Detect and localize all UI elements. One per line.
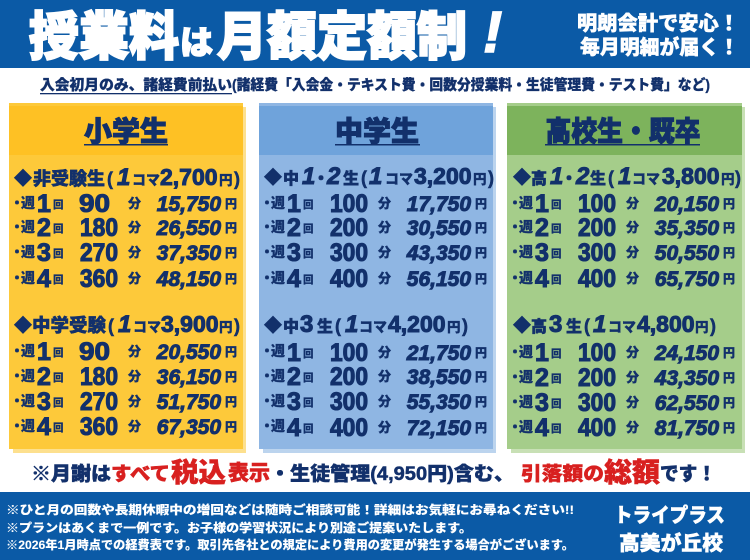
plan: non-exam: 15,750 bbox=[157, 193, 221, 216]
plan: grades 1-2: 1 bbox=[618, 163, 631, 190]
heading: junior high: 中学生 bbox=[335, 116, 419, 147]
plan: grades 1-2: 56,150 bbox=[407, 268, 471, 291]
plan: non-exam: 円 bbox=[225, 197, 237, 211]
plan: grades 1-2: 50,550 bbox=[655, 242, 719, 265]
plan: grade 3: ◆ bbox=[264, 316, 282, 336]
plan: grades 1-2: 3,800 bbox=[662, 163, 720, 189]
plan: exam: 分 bbox=[128, 394, 141, 409]
plan: grade 3: ) bbox=[710, 316, 716, 336]
plan: non-exam: 週 bbox=[21, 195, 35, 211]
plan: grades 1-2: ) bbox=[735, 168, 741, 188]
plan: non-exam: 非受験生 bbox=[33, 168, 105, 189]
plan: non-exam: 円 bbox=[225, 221, 237, 235]
tagline: 明朗会計で安心！ bbox=[577, 12, 739, 35]
plan: exam: 67,350 bbox=[157, 416, 221, 439]
plan: exam: 週 bbox=[21, 368, 35, 384]
header band bbox=[0, 0, 750, 68]
plan: non-exam: 2,700 bbox=[160, 164, 218, 190]
plan: grade 3: 分 bbox=[626, 370, 639, 385]
plan: exam: 1 bbox=[118, 311, 131, 338]
footnotes: ※プランはあくまで一例です。お子様の学習状況により別途ご提案いたします。 bbox=[6, 520, 472, 535]
plan: grades 1-2: 回 bbox=[303, 248, 314, 260]
plan: grade 3 bbox=[508, 311, 735, 442]
plan: grade 3: 1 bbox=[535, 339, 549, 367]
plan: grades 1-2: 週 bbox=[271, 244, 285, 260]
plan: grade 3: 4 bbox=[287, 414, 301, 442]
plan: grade 3: ・ bbox=[260, 393, 274, 409]
plan: exam: 週 bbox=[21, 418, 35, 434]
panel: junior high bbox=[259, 103, 496, 453]
plan: non-exam: ・ bbox=[10, 244, 24, 260]
plan: grades 1-2: コマ bbox=[632, 171, 660, 187]
plan: grades 1-2: 週 bbox=[519, 270, 533, 286]
plan: non-exam: 1 bbox=[117, 164, 130, 191]
plan: non-exam: 回 bbox=[53, 223, 64, 235]
plan: exam: ◆ bbox=[14, 316, 32, 336]
plan: grades 1-2: ・ bbox=[508, 219, 522, 235]
plan: grade 3: ) bbox=[462, 316, 468, 336]
plan: grades 1-2: 100 bbox=[330, 190, 368, 218]
plan: grades 1-2: 分 bbox=[378, 196, 391, 211]
plan: grades 1-2: 4 bbox=[535, 265, 549, 293]
plan: grades 1-2: 3 bbox=[535, 239, 549, 267]
plan: grades 1-2: 生 bbox=[343, 169, 359, 188]
plan: grade 3: 中 bbox=[283, 317, 299, 336]
plan: grade 3: 回 bbox=[551, 348, 562, 360]
plan: exam: 1 bbox=[37, 338, 51, 366]
plan: grade 3: ・ bbox=[260, 343, 274, 359]
plan: grades 1-2: 300 bbox=[330, 239, 368, 267]
plan: grades 1-2: 分 bbox=[378, 271, 391, 286]
plan: non-exam: 37,350 bbox=[157, 242, 221, 265]
plan: grade 3: 400 bbox=[578, 414, 616, 442]
plan: grade 3: 週 bbox=[271, 418, 285, 434]
plan: exam: 270 bbox=[80, 388, 118, 416]
plan: grade 3: 分 bbox=[378, 369, 391, 384]
plan: grades 1-2: 回 bbox=[551, 248, 562, 260]
plan: grade 3: ( bbox=[584, 316, 590, 336]
plan: grade 3: 100 bbox=[330, 339, 368, 367]
plan: grade 3: 200 bbox=[330, 363, 368, 391]
school name bbox=[614, 504, 725, 555]
plan: exam: ・ bbox=[10, 418, 24, 434]
plan: non-exam: 円 bbox=[225, 246, 237, 260]
plan: grade 3: ・ bbox=[508, 394, 522, 410]
plan: non-exam: 週 bbox=[21, 219, 35, 235]
plan: grades 1-2: 400 bbox=[578, 265, 616, 293]
plan: grades 1-2: 週 bbox=[271, 270, 285, 286]
plan: grades 1-2: 2 bbox=[287, 214, 301, 242]
plan: exam: ・ bbox=[10, 393, 24, 409]
plan: grade 3: 円 bbox=[723, 346, 735, 360]
plan: grades 1-2: 高 bbox=[531, 169, 547, 188]
plan: non-exam: 円 bbox=[225, 272, 237, 286]
plan: grades 1-2: ◆ bbox=[513, 168, 531, 188]
plan: grade 3: 分 bbox=[378, 394, 391, 409]
plan: grade 3: ・ bbox=[508, 344, 522, 360]
plan: grades 1-2: 週 bbox=[271, 195, 285, 211]
plan: grade 3: コマ bbox=[359, 319, 387, 335]
plan: grade 3: 円 bbox=[475, 370, 487, 384]
plan: grades 1-2: 中 bbox=[283, 169, 299, 188]
plan: grades 1-2: 生 bbox=[590, 169, 606, 188]
plan: grade 3: 2 bbox=[287, 363, 301, 391]
plan: grade 3: ・ bbox=[260, 368, 274, 384]
plan: grade 3: 4,200 bbox=[388, 311, 446, 337]
plan: grades 1-2: 回 bbox=[551, 223, 562, 235]
plan: grades 1-2: 300 bbox=[578, 239, 616, 267]
tax note bbox=[31, 458, 716, 488]
plan: non-exam: 円 bbox=[219, 173, 232, 188]
tax note: 引落額の bbox=[521, 463, 604, 485]
plan: grade 3: 回 bbox=[303, 372, 314, 384]
plan: grade 3: 円 bbox=[475, 421, 487, 435]
footnotes: ※2026年1月時点での経費表です。取引先各社との規定により費用の変更が発生する場合がございます。 bbox=[6, 537, 574, 552]
plan: grades 1-2: 週 bbox=[519, 244, 533, 260]
plan: grade 3: 1 bbox=[345, 311, 358, 338]
tax note: です！ bbox=[660, 463, 716, 485]
plan: grade 3: 円 bbox=[723, 371, 735, 385]
plan: grades 1-2: ・ bbox=[561, 171, 577, 188]
plan: non-exam: 回 bbox=[53, 248, 64, 260]
plan: grades 1-2: ・ bbox=[260, 219, 274, 235]
title: は bbox=[180, 24, 213, 61]
plan: grades 1-2: ・ bbox=[508, 244, 522, 260]
plan: non-exam: コマ bbox=[132, 172, 160, 188]
plan: grades 1-2: 200 bbox=[330, 214, 368, 242]
plan: exam: コマ bbox=[133, 319, 161, 335]
plan: grade 3: コマ bbox=[608, 319, 636, 335]
plan: grades 1-2: 17,750 bbox=[407, 193, 471, 216]
plan: grade 3: 分 bbox=[378, 420, 391, 435]
plan: grades 1-2: 20,150 bbox=[654, 193, 719, 216]
plan: exam: 90 bbox=[79, 338, 110, 366]
plan: grades 1-2: 2 bbox=[535, 214, 549, 242]
plan: grade 3: 円 bbox=[475, 395, 487, 409]
plan: non-exam: 分 bbox=[128, 220, 141, 235]
plan: grades 1-2: 分 bbox=[378, 220, 391, 235]
footnotes bbox=[6, 502, 574, 552]
plan: grades 1-2: ・ bbox=[508, 195, 522, 211]
plan: non-exam: 分 bbox=[128, 196, 141, 211]
plan: grades 1-2: 円 bbox=[723, 272, 735, 286]
plan: non-exam: 1 bbox=[37, 190, 51, 218]
plan: non-exam bbox=[10, 164, 240, 293]
plan: grade 3: 分 bbox=[626, 420, 639, 435]
plan: grade 3: 回 bbox=[303, 423, 314, 435]
plan: exam: 回 bbox=[53, 397, 64, 409]
plan: exam: 円 bbox=[225, 420, 237, 434]
plan: grades 1-2: 200 bbox=[578, 214, 616, 242]
plan: exam: 4 bbox=[37, 413, 51, 441]
plan: exam: 円 bbox=[225, 370, 237, 384]
plan: grades 1-2: 回 bbox=[303, 199, 314, 211]
panel: elementary bbox=[9, 103, 246, 453]
plan: grades 1-2: 4 bbox=[287, 265, 301, 293]
plan: grade 3: 円 bbox=[475, 346, 487, 360]
plan: grades 1-2 bbox=[260, 163, 494, 293]
tax note: ・生徒管理(4,950円)含む、 bbox=[270, 462, 514, 485]
plan: grades 1-2: 円 bbox=[473, 172, 486, 187]
plan: grade 3: 1 bbox=[287, 339, 301, 367]
plan: grade 3: 38,550 bbox=[407, 366, 471, 389]
plan: grade 3: ( bbox=[335, 316, 341, 336]
plan: non-exam: 48,150 bbox=[156, 268, 221, 291]
plan: grades 1-2: 円 bbox=[723, 246, 735, 260]
plan: grade 3: 21,750 bbox=[406, 342, 471, 365]
plan: exam: 円 bbox=[219, 320, 232, 335]
plan: grades 1-2: 円 bbox=[475, 221, 487, 235]
plan: grades 1-2: ・ bbox=[508, 270, 522, 286]
plan: exam: 円 bbox=[225, 395, 237, 409]
plan: exam: 2 bbox=[37, 363, 51, 391]
plan: grade 3: 4,800 bbox=[637, 311, 695, 337]
heading: elementary: 小学生 bbox=[84, 116, 168, 147]
plan: grade 3: 分 bbox=[626, 345, 639, 360]
plan: non-exam: ( bbox=[107, 169, 113, 189]
plan: grade 3: 週 bbox=[271, 368, 285, 384]
prepayment note: (諸経費「入会金・テキスト費・回数分授業料・生徒管理費・テスト費」など) bbox=[232, 76, 710, 94]
tax note: 表示 bbox=[228, 462, 270, 485]
plan: grades 1-2: 回 bbox=[551, 199, 562, 211]
title bbox=[29, 0, 502, 67]
plan: grade 3: 週 bbox=[271, 393, 285, 409]
plan: grade 3: 円 bbox=[723, 396, 735, 410]
plan: grades 1-2: 回 bbox=[551, 274, 562, 286]
plan: grade 3 bbox=[260, 311, 487, 442]
prepayment note: 入会初月のみ、諸経費前払い bbox=[40, 76, 232, 94]
tax note: 税込 bbox=[171, 458, 226, 488]
plan: non-exam: 3 bbox=[37, 239, 51, 267]
plan: non-exam: ・ bbox=[10, 219, 24, 235]
tax note: ※月謝は bbox=[31, 463, 111, 485]
plan: non-exam: ・ bbox=[10, 270, 24, 286]
plan: non-exam: 回 bbox=[53, 274, 64, 286]
plan: grades 1-2: 円 bbox=[723, 221, 735, 235]
plan: exam: 回 bbox=[53, 347, 64, 359]
plan: non-exam: ◆ bbox=[14, 169, 32, 189]
plan: grade 3: 1 bbox=[593, 311, 606, 338]
plan: grade 3: 回 bbox=[551, 373, 562, 385]
plan: grades 1-2: ・ bbox=[313, 171, 329, 188]
plan: grade 3: 43,350 bbox=[654, 367, 719, 390]
plan: grades 1-2: 35,350 bbox=[655, 217, 719, 240]
plan: grades 1-2: 65,750 bbox=[655, 268, 719, 291]
plan: grades 1-2: 分 bbox=[626, 196, 639, 211]
plan: grades 1-2: 分 bbox=[626, 245, 639, 260]
plan: exam: 分 bbox=[128, 344, 141, 359]
plan: exam: ( bbox=[108, 316, 114, 336]
title: 月額定額制 bbox=[217, 9, 467, 67]
plan: grades 1-2: 分 bbox=[626, 220, 639, 235]
plan: grade 3: 3 bbox=[549, 311, 562, 338]
plan: grades 1-2: ・ bbox=[260, 244, 274, 260]
plan: grades 1-2: 円 bbox=[721, 172, 734, 187]
plan: non-exam: 分 bbox=[128, 271, 141, 286]
plan: grade 3: 300 bbox=[330, 388, 368, 416]
tagline: 毎月明細が届く！ bbox=[580, 35, 739, 59]
plan: grade 3: 週 bbox=[271, 343, 285, 359]
plan: exam: ・ bbox=[10, 368, 24, 384]
plan: grades 1-2: 週 bbox=[271, 219, 285, 235]
footnotes: ※ひと月の回数や長期休暇中の増回などは随時ご相談可能！詳細はお気軽にお尋ねください!! bbox=[6, 502, 574, 517]
plan: grade 3: 回 bbox=[551, 398, 562, 410]
plan: grade 3: 分 bbox=[626, 395, 639, 410]
plan: grades 1-2: 1 bbox=[369, 163, 382, 190]
plan: grade 3: 24,150 bbox=[654, 342, 719, 365]
plan: exam: ・ bbox=[10, 343, 24, 359]
plan: grade 3: 生 bbox=[566, 317, 582, 336]
plan: grade 3: 400 bbox=[330, 414, 368, 442]
title: 授業料 bbox=[29, 9, 179, 67]
plan: exam: 3,900 bbox=[161, 311, 219, 337]
plan: exam: 51,750 bbox=[157, 391, 221, 414]
plan: grade 3: 62,550 bbox=[655, 392, 719, 415]
plan: exam: 分 bbox=[128, 419, 141, 434]
plan: grade 3: 200 bbox=[578, 364, 616, 392]
plan: grade 3: 4 bbox=[535, 414, 549, 442]
plan: grade 3: ・ bbox=[508, 369, 522, 385]
plan: exam: 円 bbox=[225, 345, 237, 359]
plan: grades 1-2: 2 bbox=[326, 163, 341, 190]
plan: grades 1-2: 1 bbox=[287, 190, 301, 218]
plan: grade 3: ・ bbox=[260, 418, 274, 434]
plan: grade 3: 回 bbox=[303, 397, 314, 409]
plan: grades 1-2: 100 bbox=[578, 190, 616, 218]
plan: grades 1-2: 円 bbox=[475, 272, 487, 286]
plan: non-exam: 回 bbox=[53, 199, 64, 211]
plan: grades 1-2: 30,550 bbox=[407, 217, 471, 240]
plan: exam bbox=[10, 311, 240, 441]
plan: non-exam: 分 bbox=[128, 245, 141, 260]
plan: grades 1-2: 円 bbox=[475, 197, 487, 211]
plan: non-exam: 90 bbox=[79, 190, 110, 218]
plan: non-exam: 週 bbox=[21, 244, 35, 260]
plan: exam: 分 bbox=[128, 369, 141, 384]
plan: grade 3: ・ bbox=[508, 419, 522, 435]
plan: grade 3: 高 bbox=[531, 317, 547, 336]
plan: exam: 36,150 bbox=[157, 366, 221, 389]
plan: grades 1-2: コマ bbox=[385, 171, 413, 187]
plan: non-exam: 週 bbox=[21, 270, 35, 286]
plan: grades 1-2: 回 bbox=[303, 274, 314, 286]
plan: grades 1-2: 2 bbox=[575, 163, 590, 190]
prepayment note bbox=[40, 76, 710, 94]
plan: non-exam: 4 bbox=[37, 265, 51, 293]
plan: grades 1-2: 400 bbox=[330, 265, 368, 293]
plan: grades 1-2: 円 bbox=[475, 246, 487, 260]
plan: exam: 3 bbox=[37, 388, 51, 416]
plan: grade 3: 81,750 bbox=[655, 417, 719, 440]
plan: non-exam: 2 bbox=[37, 214, 51, 242]
plan: grade 3: 3 bbox=[287, 388, 301, 416]
tax note: すべて bbox=[111, 463, 170, 485]
plan: grades 1-2: 3 bbox=[287, 239, 301, 267]
plan: grade 3: 生 bbox=[317, 317, 333, 336]
plan: exam: 20,550 bbox=[156, 341, 221, 364]
plan: grades 1-2: ・ bbox=[260, 270, 274, 286]
plan: grade 3: 円 bbox=[447, 320, 460, 335]
plan: non-exam: 26,550 bbox=[156, 217, 221, 240]
plan: exam: 回 bbox=[53, 422, 64, 434]
plan: grade 3: 円 bbox=[695, 320, 708, 335]
tagline bbox=[577, 12, 739, 59]
plan: grade 3: 回 bbox=[303, 348, 314, 360]
plan: grade 3: ◆ bbox=[513, 316, 531, 336]
plan: grades 1-2: 円 bbox=[723, 197, 735, 211]
plan: exam: 週 bbox=[21, 343, 35, 359]
plan: grade 3: 2 bbox=[535, 364, 549, 392]
plan: grades 1-2 bbox=[508, 163, 741, 293]
plan: exam: 回 bbox=[53, 372, 64, 384]
plan: grades 1-2: 1 bbox=[302, 163, 315, 190]
panel: high school bbox=[507, 103, 745, 453]
plan: grades 1-2: 回 bbox=[303, 223, 314, 235]
plan: exam: 中学受験 bbox=[32, 315, 107, 336]
plan: grades 1-2: ・ bbox=[260, 195, 274, 211]
plan: grades 1-2: 分 bbox=[626, 271, 639, 286]
plan: grades 1-2: ( bbox=[608, 168, 614, 188]
plan: grade 3: 100 bbox=[578, 339, 616, 367]
heading: high school: 高校生・既卒 bbox=[546, 116, 700, 147]
tax note: 総額 bbox=[604, 458, 660, 488]
plan: non-exam: 180 bbox=[80, 214, 118, 242]
plan: grades 1-2: 1 bbox=[535, 190, 549, 218]
plan: non-exam: ・ bbox=[10, 195, 24, 211]
school name: 高美が丘校 bbox=[619, 531, 723, 555]
plan: grades 1-2: 週 bbox=[519, 195, 533, 211]
plan: grade 3: 週 bbox=[519, 394, 533, 410]
school name: トライプラス bbox=[614, 504, 725, 527]
plan: grade 3: 週 bbox=[519, 419, 533, 435]
plan: grades 1-2: ( bbox=[361, 168, 367, 188]
plan: grade 3: 週 bbox=[519, 344, 533, 360]
footer band bbox=[0, 492, 750, 560]
plan: grade 3: 円 bbox=[723, 421, 735, 435]
plan: grades 1-2: 分 bbox=[378, 245, 391, 260]
plan: grade 3: 回 bbox=[551, 423, 562, 435]
plan: non-exam: 360 bbox=[80, 265, 118, 293]
plan: grade 3: 72,150 bbox=[407, 417, 471, 440]
plan: grades 1-2: ) bbox=[488, 168, 494, 188]
plan: grade 3: 55,350 bbox=[407, 391, 471, 414]
plan: exam: ) bbox=[234, 316, 240, 336]
plan: non-exam: ) bbox=[234, 169, 240, 189]
plan: grade 3: 3 bbox=[300, 311, 313, 338]
plan: grade 3: 分 bbox=[378, 345, 391, 360]
plan: grades 1-2: 週 bbox=[519, 219, 533, 235]
plan: grades 1-2: 1 bbox=[550, 163, 563, 190]
plan: grades 1-2: 43,350 bbox=[406, 242, 471, 265]
title: ! bbox=[483, 0, 502, 65]
plan: grade 3: 3 bbox=[535, 389, 549, 417]
plan: exam: 週 bbox=[21, 393, 35, 409]
plan: grade 3: 週 bbox=[519, 369, 533, 385]
plan: exam: 180 bbox=[80, 363, 118, 391]
plan: exam: 360 bbox=[80, 413, 118, 441]
plan: non-exam: 270 bbox=[80, 239, 118, 267]
plan: grades 1-2: ◆ bbox=[264, 168, 282, 188]
plan: grades 1-2: 3,200 bbox=[414, 163, 472, 189]
plan: grade 3: 300 bbox=[578, 389, 616, 417]
